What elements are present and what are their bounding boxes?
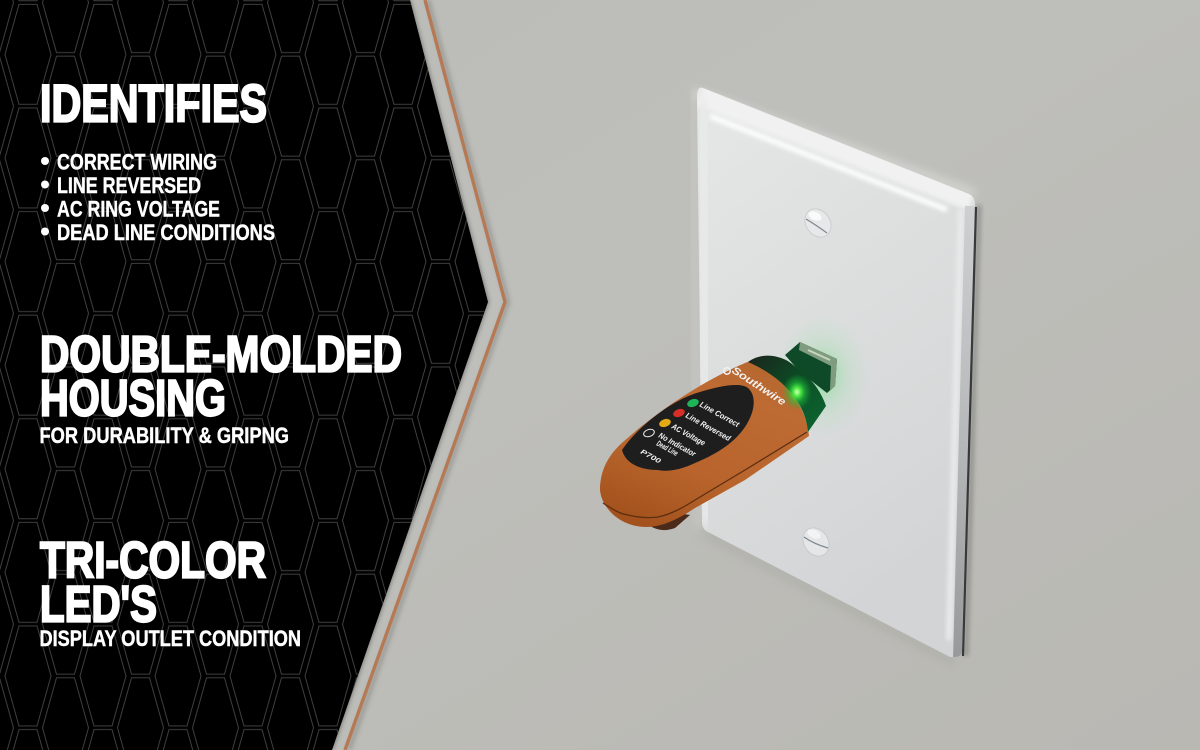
heading: double-molded housing [40,326,402,426]
status dots [643,398,700,438]
bullet list: CORRECT WIRING [57,150,217,174]
screw top [800,204,836,242]
plate glow and shadow [693,92,979,662]
wall plate photo [693,88,979,662]
copper chevron line [345,0,508,750]
underside foot [650,510,690,530]
brand logo mark [724,368,730,374]
subheading: outlet condition: DISPLAY OUTLET CONDITION [40,626,301,651]
heading: identifies: IDENTIFIES [40,74,267,134]
label text [639,400,741,465]
feature block: identifies [40,74,275,245]
plate bevel shading [700,95,972,660]
plug blades [785,342,837,393]
black chevron panel with hexagon pattern [0,0,489,750]
orange body [600,361,809,527]
brand name: Southwire [729,364,788,408]
feature block: double-molded housing [40,326,402,448]
green translucent end cap [748,356,826,432]
heading: tri-color LEDs [40,532,266,632]
heading: tri-color LEDs: LED'S [40,576,157,632]
feature block: tri-color LEDs [40,532,301,651]
plate right edge line [963,207,976,656]
label text: AC Voltage [669,421,707,448]
subheading: durability: FOR DURABILITY & GRIPNG [40,423,289,448]
label text: Line Correct [698,400,741,429]
bullet list [41,150,275,245]
wall plate [697,88,975,657]
black label oval [622,385,754,471]
green glow on plate [774,313,870,437]
bullet list: AC RING VOLTAGE [57,196,220,222]
heading: double-molded housing: HOUSING [40,370,226,426]
heading: double-molded housing: DOUBLE-MOLDED [40,326,402,382]
body seam [603,432,807,518]
label text: No Indicator [657,431,698,459]
bullet list: LINE REVERSED [57,173,201,198]
label text: Dead Line [655,439,680,458]
label text: Line Reversed [684,411,733,443]
label text: P700 [639,449,662,465]
heading: tri-color LEDs: TRI-COLOR [40,532,266,588]
lit green LED [782,374,812,410]
outlet tester device [600,313,870,530]
bullet list: DEAD LINE CONDITIONS [57,220,275,245]
screw bottom [798,523,834,561]
